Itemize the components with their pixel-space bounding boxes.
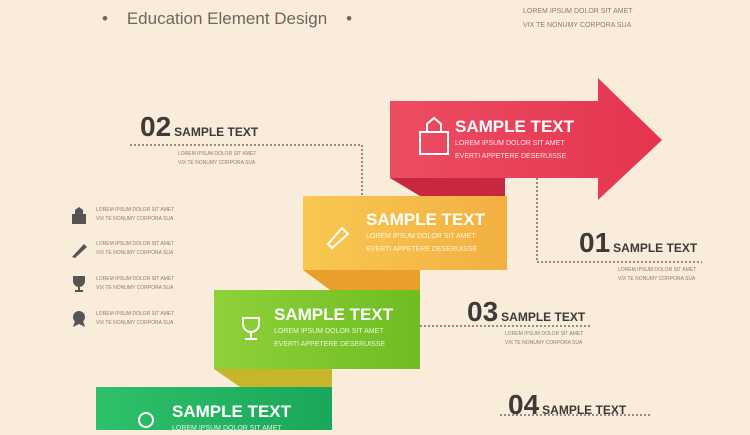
left list: LOREM IPSUM DOLOR SIT AMET bbox=[96, 311, 174, 317]
lime box bbox=[214, 290, 420, 369]
folds bbox=[390, 178, 505, 196]
top right text: LOREM IPSUM DOLOR SIT AMET bbox=[523, 8, 633, 15]
list icon: diploma bbox=[72, 244, 87, 258]
step 1 text: EVERTI APPETERE DESERUISSE bbox=[455, 153, 566, 160]
label 01: 01SAMPLE TEXT bbox=[579, 227, 697, 258]
step 3 text: EVERTI APPETERE DESERUISSE bbox=[274, 341, 385, 348]
text: LOREM IPSUM DOLOR SIT AMET bbox=[618, 267, 696, 273]
text: VIX TE NONUMY CORPORA SUA bbox=[178, 160, 255, 166]
left list: VIX TE NONUMY CORPORA SUA bbox=[96, 216, 173, 222]
step 1 text: SAMPLE TEXT bbox=[455, 117, 574, 136]
step 4 text: SAMPLE TEXT bbox=[172, 402, 291, 421]
step 2 text: LOREM IPSUM DOLOR SIT AMET bbox=[366, 233, 476, 240]
icons in boxes bbox=[139, 118, 448, 427]
left list: VIX TE NONUMY CORPORA SUA bbox=[96, 320, 173, 326]
yellow box bbox=[303, 196, 507, 270]
label 03: 03SAMPLE TEXT bbox=[467, 296, 585, 327]
left list: LOREM IPSUM DOLOR SIT AMET bbox=[96, 207, 174, 213]
step 2 text bbox=[366, 210, 485, 253]
step 3 text bbox=[274, 305, 393, 348]
left list: VIX TE NONUMY CORPORA SUA bbox=[96, 250, 173, 256]
step 4 text bbox=[172, 402, 291, 432]
left list: LOREM IPSUM DOLOR SIT AMET bbox=[96, 241, 174, 247]
top right text bbox=[523, 8, 633, 29]
text: LOREM IPSUM DOLOR SIT AMET bbox=[505, 331, 583, 337]
left list: VIX TE NONUMY CORPORA SUA bbox=[96, 285, 173, 291]
label 04: 04SAMPLE TEXT bbox=[508, 389, 626, 420]
step 3 text: LOREM IPSUM DOLOR SIT AMET bbox=[274, 328, 384, 335]
step 4 text: LOREM IPSUM DOLOR SIT AMET bbox=[172, 425, 282, 432]
text: VIX TE NONUMY CORPORA SUA bbox=[618, 276, 695, 282]
step 3 text: SAMPLE TEXT bbox=[274, 305, 393, 324]
list icon: trophy bbox=[73, 276, 85, 292]
left list bbox=[72, 207, 174, 327]
list icon: medal bbox=[73, 311, 85, 327]
red arrow bbox=[390, 78, 662, 200]
step 1 text bbox=[455, 117, 574, 160]
top right text: VIX TE NONUMY CORPORA SUA bbox=[523, 22, 631, 29]
step 1 text: LOREM IPSUM DOLOR SIT AMET bbox=[455, 140, 565, 147]
step 2 text: SAMPLE TEXT bbox=[366, 210, 485, 229]
list icon: school bbox=[72, 207, 86, 224]
label 02: 02SAMPLE TEXT bbox=[140, 111, 258, 142]
green box bbox=[96, 387, 332, 435]
title: • Education Element Design • bbox=[102, 9, 352, 28]
step 2 text: EVERTI APPETERE DESERUISSE bbox=[366, 246, 477, 253]
text: LOREM IPSUM DOLOR SIT AMET bbox=[178, 151, 256, 157]
left list: LOREM IPSUM DOLOR SIT AMET bbox=[96, 276, 174, 282]
text: VIX TE NONUMY CORPORA SUA bbox=[505, 340, 582, 346]
dotted connectors bbox=[130, 145, 702, 415]
